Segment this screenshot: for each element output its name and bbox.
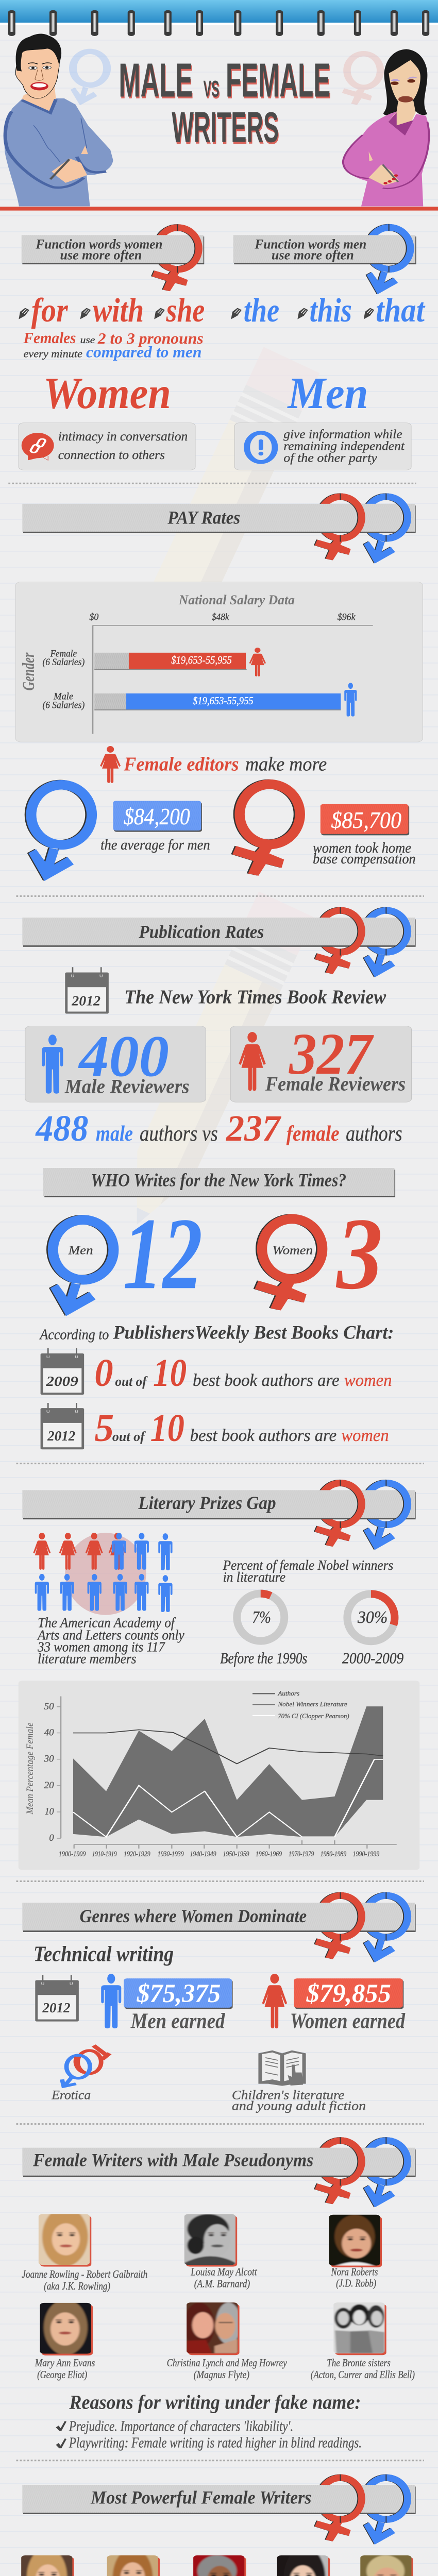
- section: female writers with male pseudonyms: [22, 2137, 416, 2451]
- notebook cover band: [0, 0, 438, 25]
- word list: men: this: [310, 292, 352, 329]
- stat: 2012 best book authors: out of: [112, 1429, 146, 1444]
- text: american academy: Arts and Letters counts only: [37, 1627, 184, 1643]
- illustration: male writer: [5, 34, 113, 207]
- text: american academy: 33 women among its 117: [38, 1639, 165, 1655]
- title: MALE: [119, 54, 193, 107]
- panel: national salary chart: $0: [89, 612, 99, 622]
- panel: nobel winners line chart: 1940-1949: [190, 1850, 216, 1858]
- photo: Mary Higgins Clark: [360, 2555, 413, 2576]
- heading: women: Women: [43, 369, 171, 418]
- section: function words: [8, 224, 426, 483]
- label: Mary Ann Evans: (George Eliot): [37, 2369, 87, 2381]
- panel: nobel winners line chart: 0: [49, 1833, 54, 1843]
- label: Joanne Rowling: [22, 2268, 147, 2292]
- stat: authors comparison: 488: [35, 1108, 88, 1149]
- stat: 2012 best book authors: 5: [94, 1406, 114, 1449]
- photo: Mary Ann Evans: [40, 2303, 93, 2355]
- panel: nobel winners line chart: Nobel Winners Literature: [278, 1701, 347, 1708]
- photo: J.K. Rowling: [21, 2555, 74, 2576]
- stat: 2009 best book authors: women: [344, 1370, 392, 1389]
- panel: male reviewers: 400: [78, 1024, 169, 1089]
- panel: national salary chart: (6 Salaries): [42, 700, 85, 710]
- panel: nobel winners line chart: 30: [44, 1753, 54, 1764]
- section: pay rates: [15, 493, 423, 881]
- word list: women: with: [93, 292, 144, 329]
- watermark: pencil lower: [109, 891, 315, 1238]
- stat: men average pay: the average for men: [100, 837, 210, 853]
- panel: nobel winners line chart: 1910-1919: [92, 1850, 117, 1858]
- stat: 2009 best book authors: 2009: [46, 1374, 78, 1389]
- panel: nobel winners line chart: Mean Percentage Female: [25, 1722, 36, 1815]
- stat: women 3: 3: [335, 1197, 383, 1311]
- text: pronoun statistic: every minute: [24, 348, 82, 360]
- stat: 2009 best book authors: 10: [153, 1351, 187, 1394]
- label: Christina Lynch and Meg Howrey: (Magnus Flyte): [194, 2369, 249, 2381]
- title: [119, 54, 330, 151]
- banner: publication rates: [22, 907, 416, 977]
- stat: 2009 best book authors: 0: [94, 1351, 113, 1394]
- label: Mary Ann Evans: Mary Ann Evans: [35, 2357, 95, 2369]
- section: publication rates: [16, 896, 424, 1464]
- banner: pay rates: PAY Rates: [167, 508, 240, 528]
- label: Nora Roberts: Nora Roberts: [331, 2266, 378, 2278]
- photo: Stephenie Meyer: [277, 2555, 330, 2576]
- panel: nobel winners line chart: 1900-1909: [59, 1850, 86, 1858]
- illustration: female writer: [343, 49, 430, 207]
- label: Mary Ann Evans: [35, 2357, 95, 2381]
- list: reasons: [56, 2418, 362, 2451]
- section: literary prizes gap: [16, 1480, 424, 1882]
- panel: nobel winners line chart: 1930-1939: [158, 1850, 184, 1858]
- donut: 2000-2009: [342, 1594, 403, 1667]
- photo: Danielle Steel: [107, 2555, 160, 2576]
- stat: 2009 best book authors: out of: [115, 1374, 148, 1389]
- icon: calendar 2012: [35, 1975, 79, 2022]
- heading: female editors make more: make more: [245, 753, 327, 775]
- panel: national salary chart: (6 Salaries): [42, 656, 85, 667]
- stat: men average pay: $84,200: [124, 804, 190, 830]
- panel: nobel winners line chart: 1960-1969: [256, 1850, 282, 1858]
- stat: women 3: Women: [273, 1243, 313, 1257]
- stat: authors comparison: 237: [226, 1108, 282, 1149]
- banner: who writes for the new york times: [43, 1168, 395, 1197]
- heading: publishers weekly: According to: [39, 1327, 109, 1343]
- heading: female editors make more: Female editors: [123, 753, 239, 775]
- donut: before the 1990s: 7%: [252, 1607, 271, 1627]
- heading: technical writing: Technical writing: [33, 1942, 174, 1966]
- panel: female reviewers: [230, 1021, 411, 1102]
- icon: calendar 2012: 2012: [42, 2000, 71, 2016]
- heading: percent of female nobel winners: [223, 1557, 393, 1585]
- divider bar: [0, 207, 438, 211]
- stat: authors comparison: female: [287, 1122, 340, 1146]
- panel: national salary chart: National Salary Data: [178, 592, 295, 607]
- banner: pay rates: [22, 493, 416, 564]
- panel: nobel winners line chart: 10: [45, 1806, 54, 1817]
- heading: female editors make more: [100, 746, 327, 783]
- title: VS: [204, 76, 220, 101]
- stat: 2012 best book authors: 10: [150, 1406, 184, 1449]
- panel: women communication style: [19, 423, 195, 470]
- section: publication rates: 12: [123, 1197, 203, 1311]
- banner: female writers with male pseudonyms: [22, 2137, 416, 2208]
- panel: national salary chart: [15, 582, 423, 742]
- photo: Nora Roberts: [329, 2214, 382, 2267]
- panel: function words women: Function words women: [36, 236, 162, 252]
- panel: nobel winners line chart: 40: [44, 1727, 54, 1738]
- panel: national salary chart: Male: [53, 691, 73, 702]
- label: Louisa May Alcott: Louisa May Alcott: [191, 2266, 257, 2278]
- banner: genres where women dominate: [22, 1892, 416, 1962]
- icon: calendar 2012: 2012: [72, 993, 100, 1009]
- panel: nobel winners line chart: 20: [44, 1780, 54, 1791]
- panel: male reviewers: [25, 1024, 206, 1102]
- donut: before the 1990s: Before the 1990s: [220, 1649, 307, 1667]
- icon: calendar 2012: [65, 967, 109, 1014]
- banner: literary prizes gap: Literary Prizes Gap: [138, 1493, 276, 1513]
- stat: men 12: [46, 1197, 203, 1316]
- panel: national salary chart: $19,653-55,955: [193, 695, 254, 707]
- stat: men earned: $75,375: [137, 1979, 221, 2008]
- photo: Joanne Rowling: [38, 2214, 92, 2267]
- stat: men average pay: [25, 780, 210, 881]
- donut: before the 1990s: [220, 1594, 307, 1667]
- stat: men 12: Men: [68, 1243, 93, 1257]
- banner: publication rates: Publication Rates: [139, 922, 264, 942]
- text: pronoun statistic: 2 to 3 pronouns: [97, 329, 204, 347]
- panel: women communication style: connection to others: [58, 448, 165, 462]
- banner: most powerful female writers: [22, 2475, 416, 2545]
- label: Joanne Rowling: Joanne Rowling - Robert Galbraith: [22, 2268, 147, 2280]
- panel: nobel winners line chart: 1920-1929: [124, 1850, 150, 1858]
- genre: erotica: Erotica: [52, 2088, 91, 2102]
- panel: function words men: use more often: [272, 247, 354, 263]
- word list: men: the: [244, 292, 279, 329]
- panel: nobel winners line chart: 70% CI (Clopper Pearson): [278, 1713, 349, 1720]
- panel: national salary chart: $96k: [338, 612, 356, 622]
- panel: women communication style: intimacy in conversation: [58, 429, 188, 444]
- stat: 2012 best book authors: [41, 1403, 389, 1449]
- stat: women earned: [262, 1974, 406, 2033]
- photo: Louisa May Alcott: [184, 2214, 237, 2267]
- photo: The Bronte sisters: [331, 2301, 388, 2355]
- text: american academy: [37, 1615, 184, 1667]
- label: Nora Roberts: [331, 2266, 378, 2290]
- genre: children's literature: Children's literature: [232, 2088, 344, 2102]
- label: Christina Lynch and Meg Howrey: Christina Lynch and Meg Howrey: [167, 2357, 287, 2369]
- stat: authors comparison: authors vs: [140, 1122, 218, 1146]
- heading: percent of female nobel winners: in literature: [223, 1569, 285, 1585]
- label: Louisa May Alcott: (A.M. Barnard): [194, 2278, 250, 2290]
- stat: 2012 best book authors: 2012: [47, 1428, 75, 1444]
- stat: 2009 best book authors: [41, 1348, 392, 1395]
- genre: children's literature: and young adult fiction: [232, 2099, 366, 2113]
- donut: 2000-2009: 30%: [357, 1607, 388, 1627]
- panel: men communication style: of the other party: [283, 451, 377, 465]
- stat: 2012 best book authors: best book authors are: [190, 1426, 336, 1445]
- panel: national salary chart: Gender: [20, 652, 38, 691]
- genre: erotica: [52, 2045, 109, 2102]
- panel: nobel winners line chart: 50: [44, 1701, 54, 1711]
- label: Joanne Rowling: (aka J.K. Rowling): [44, 2280, 110, 2292]
- label: The Bronte sisters: [311, 2357, 415, 2381]
- stat: 2009 best book authors: best book authors are: [193, 1370, 340, 1389]
- stat: authors comparison: male: [96, 1122, 133, 1146]
- panel: nobel winners line chart: Authors: [278, 1690, 299, 1697]
- text: american academy: literature members: [38, 1651, 137, 1667]
- photo: Toni Morrison: [193, 2555, 246, 2576]
- label: Christina Lynch and Meg Howrey: [167, 2357, 287, 2381]
- stat: men earned: [101, 1974, 233, 2033]
- stat: 2012 best book authors: women: [341, 1426, 389, 1445]
- panel: female reviewers: 327: [289, 1021, 374, 1087]
- stat: women base pay: [231, 779, 416, 876]
- panel: function words women: [22, 224, 204, 291]
- stat: men earned: Men earned: [130, 2009, 225, 2033]
- panel: function words men: Function words men: [255, 236, 366, 252]
- heading: men: Men: [287, 369, 368, 418]
- panel: nobel winners line chart: 1950-1959: [223, 1850, 249, 1858]
- panel: national salary chart: $19,653-55,955: [171, 654, 232, 666]
- panel: nobel winners line chart: 1990-1999: [353, 1850, 379, 1858]
- panel: men communication style: [234, 423, 411, 470]
- text: pronoun statistic: [23, 329, 204, 361]
- photo: Christina Lynch and Meg Howrey: [184, 2301, 241, 2355]
- panel: function words women: use more often: [60, 247, 142, 263]
- genre: children's literature: [232, 2050, 366, 2113]
- panel: nobel winners line chart: 1970-1979: [289, 1850, 314, 1858]
- label: Louisa May Alcott: [191, 2266, 257, 2290]
- panel: nobel winners line chart: 1980-1989: [321, 1850, 347, 1858]
- header: notebook binding and title: [0, 0, 438, 211]
- word list: women: [19, 292, 205, 329]
- banner: literary prizes gap: [22, 1480, 416, 1550]
- icon: faint male symbol: [69, 49, 111, 105]
- text: pronoun statistic: compared to men: [86, 343, 201, 361]
- panel: male reviewers: Male Reviewers: [64, 1076, 190, 1097]
- word list: women: for: [31, 292, 68, 329]
- panel: function words men: [233, 224, 416, 294]
- panel: nobel winners line chart: [19, 1681, 419, 1870]
- word list: men: [231, 292, 426, 329]
- text: pronoun statistic: Females: [23, 329, 76, 347]
- text: american academy: The American Academy of: [38, 1615, 176, 1631]
- icon: faint female symbol: [342, 51, 384, 105]
- word list: women: she: [166, 292, 205, 329]
- stat: women 3: [254, 1197, 383, 1311]
- spiral rings: [8, 10, 429, 36]
- panel: national salary chart: Female: [50, 648, 77, 659]
- panel: national salary chart: $48k: [212, 612, 229, 622]
- stat: authors comparison: [35, 1108, 402, 1149]
- label: Nora Roberts: (J.D. Robb): [336, 2278, 376, 2290]
- watermark: pencil upper: [114, 347, 319, 693]
- section: most powerful female writers: [13, 2461, 430, 2576]
- text: pronoun statistic: use: [80, 334, 95, 345]
- graphic: academy seal and people pictogram: [33, 1533, 173, 1615]
- section: genres where women dominate: [16, 1892, 424, 2124]
